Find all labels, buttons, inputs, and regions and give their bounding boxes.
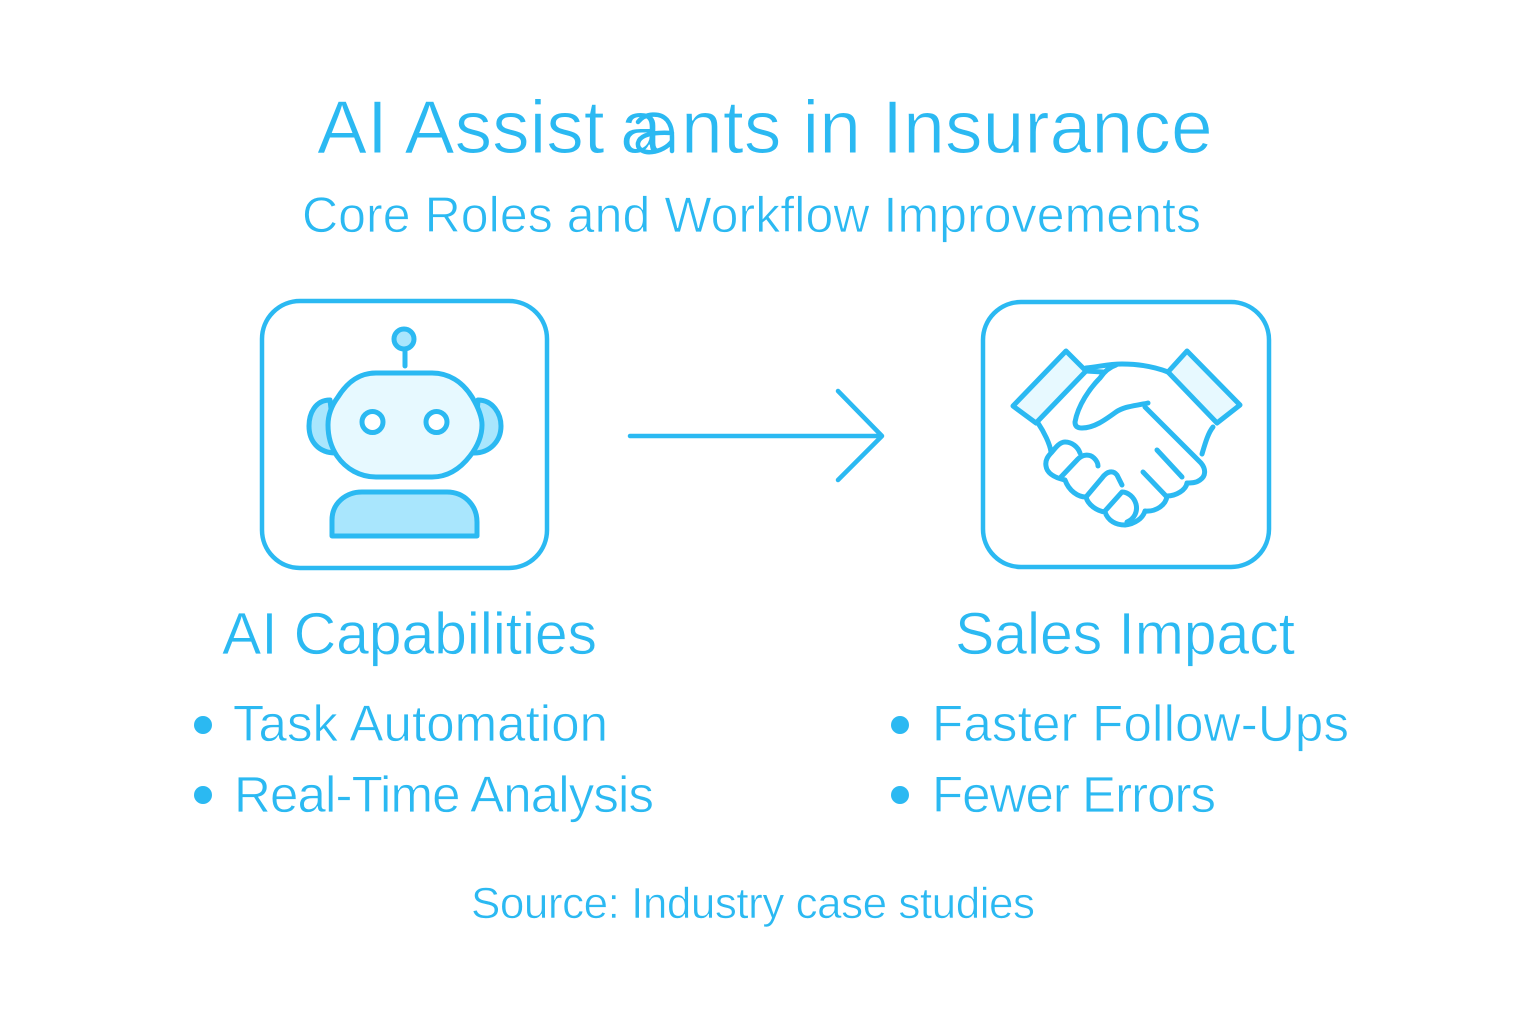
subtitle: Core Roles and Workflow Improvements xyxy=(302,187,1201,243)
list: sales impact: Faster Follow-Ups xyxy=(932,695,1349,752)
panel: sales impact icon card xyxy=(983,302,1269,567)
list: sales impact: Fewer Errors xyxy=(932,766,1216,823)
title xyxy=(317,85,1213,169)
arrow xyxy=(630,391,882,480)
title: AI Assist xyxy=(317,85,605,169)
heading: sales impact: Sales Impact xyxy=(955,601,1295,667)
list: AI capabilities xyxy=(194,695,654,823)
title: a xyxy=(620,85,662,169)
list: AI capabilities: Real-Time Analysis xyxy=(234,766,654,823)
icon: handshake xyxy=(1013,351,1240,525)
title: nts in Insurance xyxy=(681,85,1213,169)
source note: Source: Industry case studies xyxy=(471,879,1035,928)
list: AI capabilities: Task Automation xyxy=(233,695,608,752)
panel: AI capabilities icon card xyxy=(262,301,547,568)
icon: robot xyxy=(309,329,501,536)
heading: AI capabilities: AI Capabilities xyxy=(222,601,597,667)
list: sales impact xyxy=(891,695,1349,823)
